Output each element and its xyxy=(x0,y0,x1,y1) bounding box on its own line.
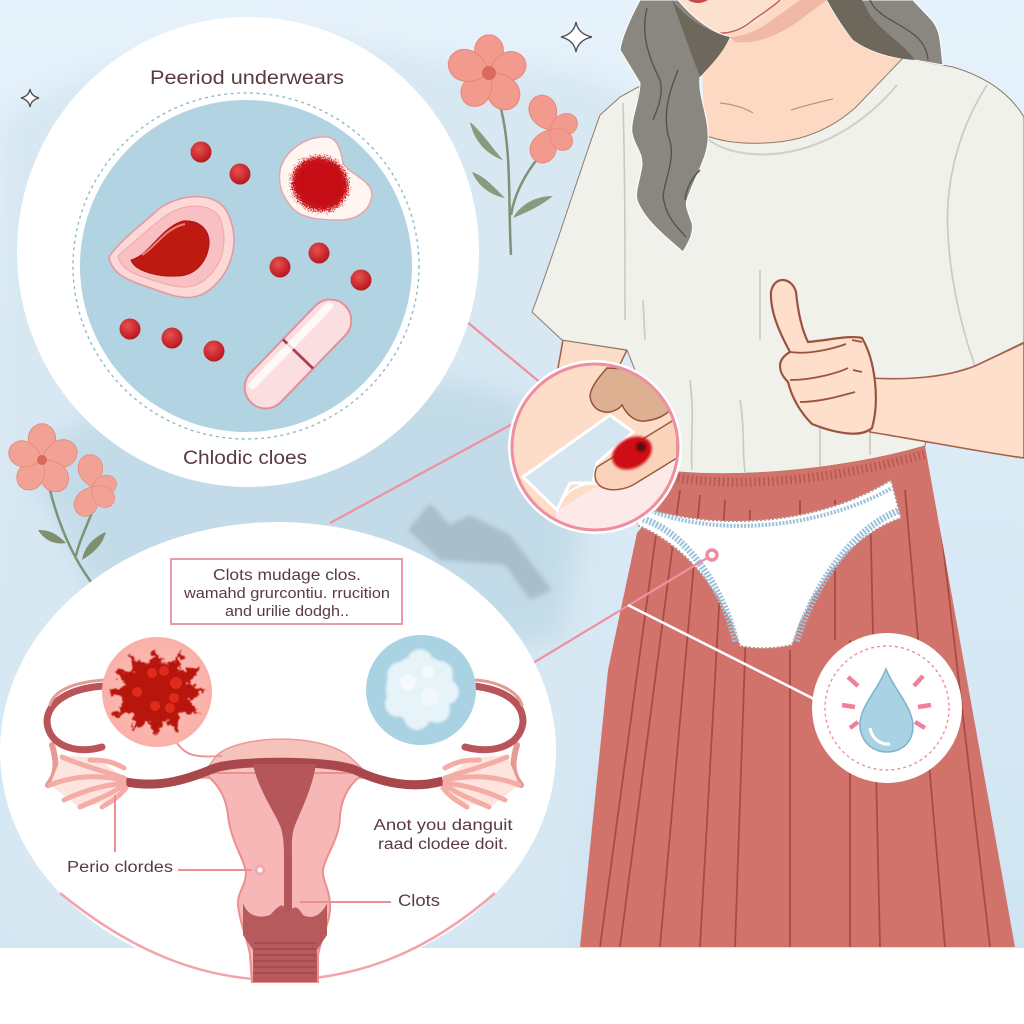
callout box xyxy=(171,559,402,624)
panel: bottom circle xyxy=(0,522,556,982)
callout box: and urilie dodgh.. xyxy=(225,603,349,620)
pill xyxy=(236,291,360,417)
label: clots xyxy=(300,891,440,910)
label: chlodic cloes: Chlodic cloes xyxy=(183,448,307,469)
fundus xyxy=(200,739,372,778)
neck and chest skin xyxy=(700,0,905,160)
cavity xyxy=(253,764,316,915)
icon: water drop xyxy=(860,669,913,752)
hair right shading xyxy=(827,0,915,60)
underwear xyxy=(637,480,901,648)
text block: raad clodee doit. xyxy=(378,836,508,853)
callout box: Clots mudage clos. xyxy=(213,567,361,584)
panel: top circle xyxy=(17,17,479,487)
left tube loop xyxy=(47,680,104,785)
hand: thumbs up xyxy=(771,280,876,434)
hair left shading xyxy=(672,0,730,77)
illustration: lower left flowers xyxy=(5,424,119,582)
hair left strands xyxy=(645,8,700,237)
left fimbriae xyxy=(50,755,126,808)
panel: water drop badge xyxy=(812,633,962,783)
cervix xyxy=(243,903,327,982)
panel: zoom circle xyxy=(508,360,682,535)
back arm xyxy=(558,340,627,385)
connector xyxy=(177,743,222,757)
skirt xyxy=(580,446,1015,947)
label: perio clordes xyxy=(67,795,264,876)
hair left xyxy=(620,0,730,252)
hair right strands xyxy=(870,0,928,60)
shirt xyxy=(532,58,1024,474)
marker on underwear xyxy=(707,550,717,560)
illustration: woman xyxy=(532,0,1024,947)
right arm xyxy=(870,343,1024,458)
right tube loop xyxy=(465,680,523,785)
heading: period underwears: Peeriod underwears xyxy=(150,68,344,89)
connector lines xyxy=(330,283,816,700)
face chin xyxy=(665,0,780,33)
clot illustration: red xyxy=(102,637,212,747)
red dots xyxy=(120,142,372,362)
right fimbriae xyxy=(443,755,519,808)
tubes xyxy=(121,762,443,785)
uterine tissue shape xyxy=(109,197,234,298)
icon: sparkles xyxy=(21,22,592,107)
uterus body xyxy=(203,773,366,982)
illustration: top flowers xyxy=(444,35,580,255)
label: clots: Clots xyxy=(398,891,440,910)
clot illustration: white xyxy=(366,635,476,745)
uterus diagram xyxy=(47,680,523,982)
clot on tissue xyxy=(279,137,372,222)
hair right xyxy=(827,0,943,65)
collarbones xyxy=(720,99,833,113)
icon: drop rays xyxy=(842,676,931,728)
label: perio clordes: Perio clordes xyxy=(67,859,173,876)
callout box: wamahd grurcontiu. rrucition xyxy=(183,585,390,602)
text block: Anot you danguit xyxy=(374,817,513,834)
text block xyxy=(374,817,513,853)
